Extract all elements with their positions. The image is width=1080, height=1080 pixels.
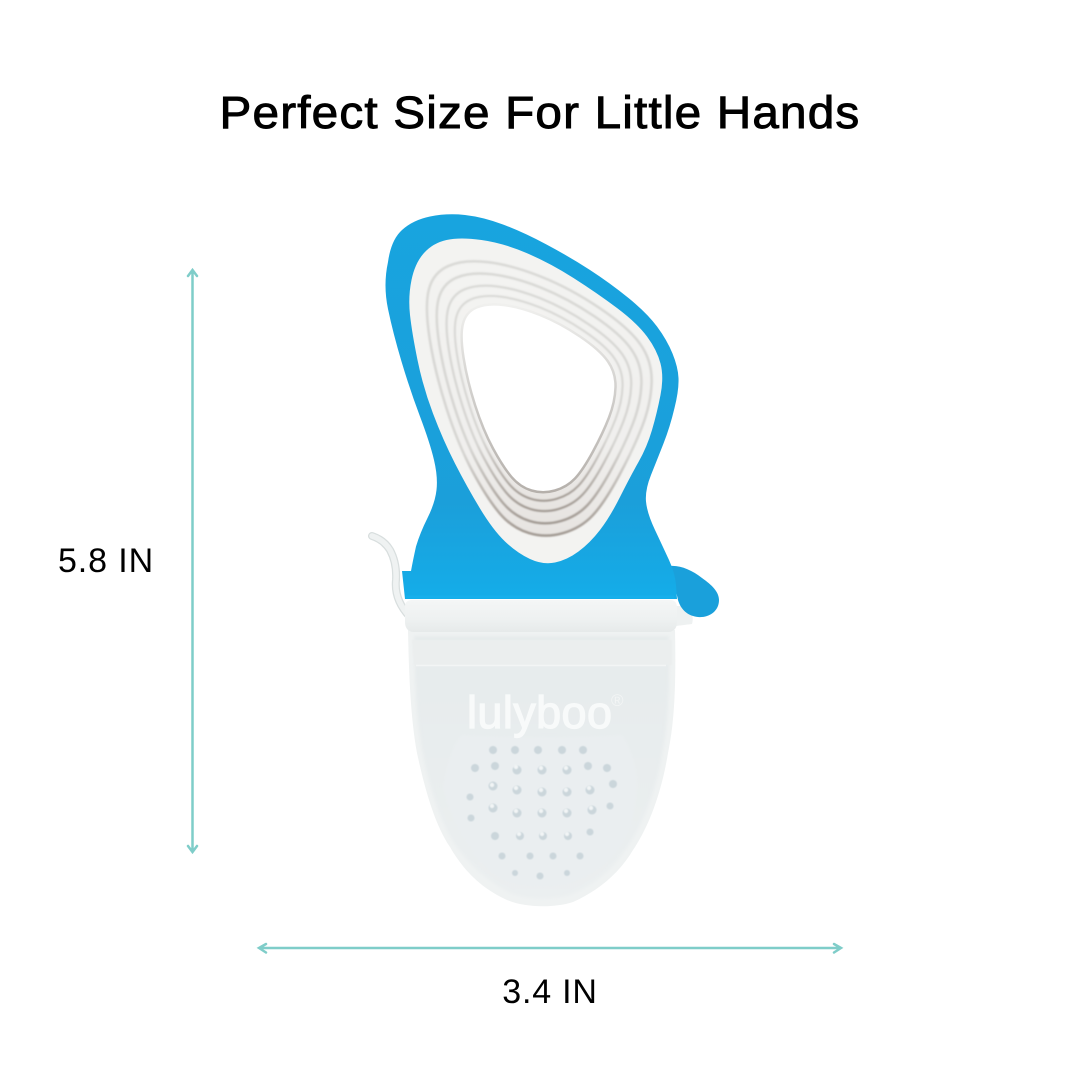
collar highlight — [406, 596, 674, 598]
handle opening — [462, 304, 616, 492]
basket — [408, 630, 675, 906]
width arrow — [259, 944, 841, 952]
height label: 5.8 IN — [58, 542, 154, 580]
blue tab — [670, 566, 719, 617]
collar ear — [670, 606, 693, 626]
brand logo: lulyboo — [467, 687, 612, 738]
registered mark: ® — [611, 691, 624, 710]
white grip — [409, 238, 662, 563]
blue handle — [386, 214, 679, 599]
title: Perfect Size For Little Hands — [220, 87, 860, 138]
white strap — [372, 536, 410, 617]
width label: 3.4 IN — [502, 973, 598, 1011]
collar ring — [405, 600, 677, 632]
height arrow — [188, 270, 197, 852]
grip ridges — [427, 261, 652, 536]
